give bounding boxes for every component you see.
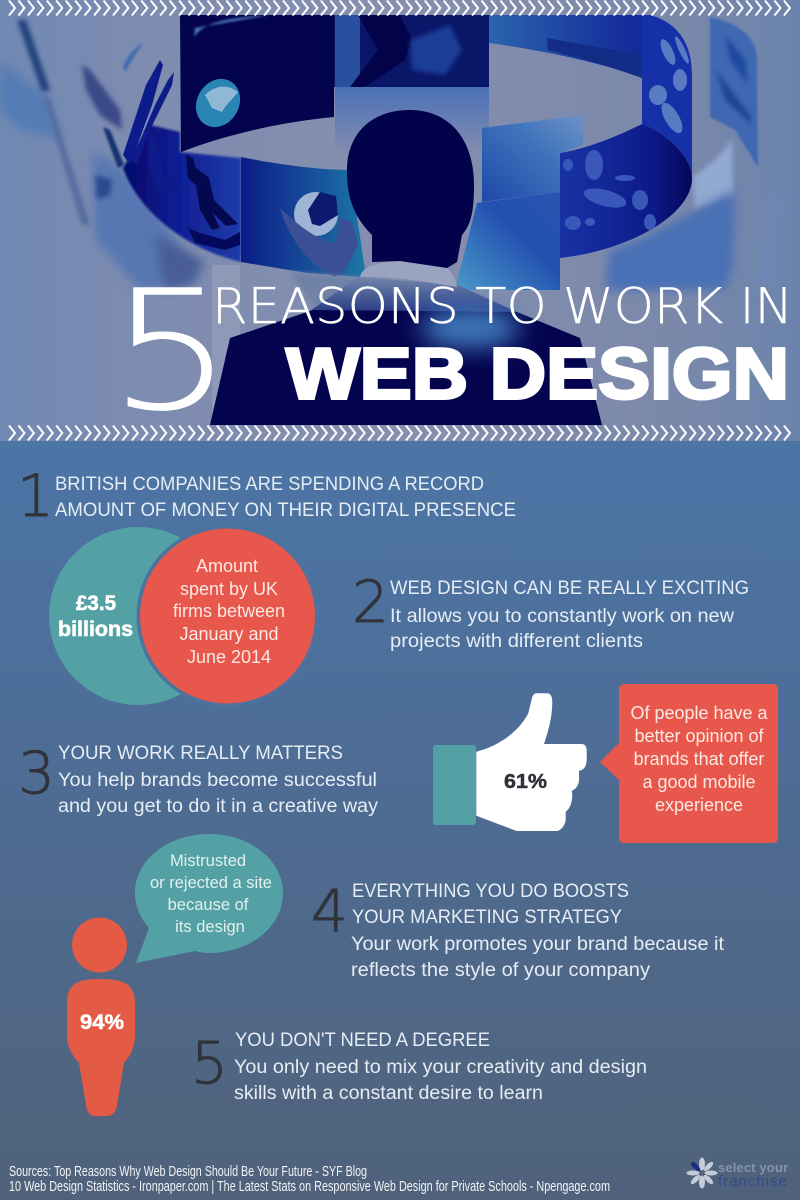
circle caption: January and — [179, 624, 279, 644]
reason 4 text — [351, 881, 725, 981]
small silhouette walking — [186, 155, 238, 230]
numeral 3: 3 — [18, 739, 55, 807]
shadow on ring floor — [188, 228, 240, 250]
reason 4 text: YOUR MARKETING STRATEGY — [352, 907, 622, 928]
back of neck under the collar — [300, 277, 530, 318]
reason 4 — [311, 877, 725, 981]
reason 2 text: projects with different clients — [390, 631, 643, 652]
reason 2 text: It allows you to constantly work on new — [390, 606, 734, 627]
water drops — [563, 150, 656, 230]
middle top screen — [334, 15, 489, 87]
bubble text: or rejected a site — [150, 874, 272, 892]
reason 5 text: YOU DON'T NEED A DEGREE — [235, 1030, 490, 1051]
circle caption: June 2014 — [187, 647, 271, 667]
hero photo: man facing a ring of screens — [0, 0, 800, 441]
sources: Sources: Top Reasons Why Web Design Should Be Your Future - SYF Blog — [9, 1164, 367, 1180]
drop highlights — [649, 35, 691, 136]
person head — [72, 918, 127, 972]
cuff — [433, 745, 476, 825]
numeral 1: 1 — [17, 462, 54, 530]
reason 1 heading line 2: AMOUNT OF MONEY ON THEIR DIGITAL PRESENCE — [55, 500, 516, 521]
reason 2 text: WEB DESIGN CAN BE REALLY EXCITING — [390, 578, 749, 599]
61 percent: 61% — [504, 771, 547, 793]
bubble text: Mistrusted — [170, 852, 246, 870]
globe continents — [308, 192, 338, 226]
tall figure shadows — [123, 60, 180, 192]
reason 2 — [352, 568, 749, 652]
reason 3 text: YOUR WORK REALLY MATTERS — [58, 743, 343, 764]
callout text: better opinion of — [634, 726, 765, 746]
chevron strip bottom — [8, 425, 792, 441]
bubble text — [150, 852, 272, 936]
callout text: Of people have a — [630, 703, 769, 723]
callout: mobile experience — [600, 684, 778, 843]
teal screen with hand and globe — [241, 157, 365, 277]
ring: dark screen with earth — [180, 15, 334, 152]
reason 3 text: You help brands become successful — [58, 770, 377, 791]
icon: person with 94% — [67, 918, 135, 1116]
teal circle — [49, 527, 227, 705]
circle caption: spent by UK — [180, 579, 278, 599]
chevron strip top — [8, 0, 792, 16]
reason 5 — [191, 1029, 647, 1104]
ring gap — [136, 525, 318, 707]
hand — [280, 208, 358, 277]
small globe in hand — [294, 192, 338, 236]
earth globe — [187, 71, 249, 135]
title line 1: REASONS TO WORK IN — [212, 278, 793, 335]
logo wordmark bottom: franchise — [718, 1173, 787, 1190]
numeral 2: 2 — [352, 568, 389, 636]
sliver at top of dark screen — [194, 15, 270, 37]
94 percent: 94% — [80, 1011, 124, 1034]
lower ring band with water drops — [560, 124, 692, 258]
building panel lower — [455, 192, 560, 290]
reason 4 text: EVERYTHING YOU DO BOOSTS — [352, 881, 629, 902]
shirt collar — [360, 261, 457, 287]
bubble text: its design — [175, 918, 245, 936]
man's neck and head — [347, 110, 474, 268]
logo flower — [686, 1158, 718, 1188]
reason 1 — [17, 462, 516, 530]
numeral 5: 5 — [191, 1029, 228, 1097]
speech bubble: mistrusted — [135, 834, 283, 963]
callout text: experience — [655, 795, 743, 815]
logo: select your franchise — [686, 1158, 788, 1190]
callout text — [630, 703, 769, 815]
chest glow — [420, 308, 520, 348]
amount label: £3.5 — [76, 592, 116, 615]
circle caption: Amount — [196, 556, 258, 576]
dark tiles on upper band — [547, 38, 642, 78]
callout text: a good mobile — [642, 772, 756, 792]
thumb hand — [476, 693, 587, 831]
reason 3 — [18, 739, 379, 817]
silhouette head on top screen — [350, 15, 412, 87]
numeral 4: 4 — [311, 877, 348, 945]
logo wordmark top: select your — [718, 1160, 788, 1175]
upper-right blurred screen — [710, 17, 758, 167]
red circle — [140, 528, 315, 704]
reason 3 text — [58, 743, 379, 817]
reason 5 text: skills with a constant desire to learn — [234, 1083, 543, 1104]
callout text: brands that offer — [634, 749, 764, 769]
blue texture strip — [335, 15, 360, 87]
upper ring band, right — [489, 15, 642, 78]
title line 2: WEB DESIGN — [286, 334, 789, 414]
drop pattern panel — [642, 15, 692, 175]
light column under the ring — [212, 265, 240, 425]
callout box — [600, 684, 778, 843]
building panel upper — [482, 115, 583, 202]
ring: left band — [123, 125, 241, 262]
bubble shape — [135, 834, 283, 963]
sources: 10 Web Design Statistics - Ironpaper.com | The Latest Stats on Responsive Web Design for Private Schools - Npengage.com — [9, 1179, 610, 1195]
pale panel beside head — [335, 87, 489, 157]
star map texture — [410, 25, 462, 75]
circle caption: firms between — [173, 601, 285, 621]
reason 3 text: and you get to do it in a creative way — [58, 796, 379, 817]
title — [109, 254, 793, 447]
sources — [9, 1164, 610, 1195]
reason 5 text — [234, 1030, 647, 1104]
bubble text: because of — [168, 896, 249, 914]
circle caption — [173, 556, 285, 667]
man's jacket — [210, 310, 602, 425]
reason 5 text: You only need to mix your creativity and design — [234, 1057, 647, 1078]
reason 1 heading: BRITISH COMPANIES ARE SPENDING A RECORD — [55, 474, 484, 495]
reason 2 text — [390, 578, 749, 652]
billions label: billions — [58, 618, 133, 641]
blurred motion streaks around the ring — [0, 20, 780, 290]
reason 4 text: Your work promotes your brand because it — [351, 934, 725, 955]
person body — [67, 979, 135, 1116]
reason 4 text: reflects the style of your company — [351, 960, 651, 981]
overlapping circles: spending — [49, 525, 318, 707]
icon: thumbs up with 61% — [433, 693, 587, 831]
blurred arm below the panel — [290, 272, 362, 312]
big numeral 5: 5 — [109, 254, 233, 447]
